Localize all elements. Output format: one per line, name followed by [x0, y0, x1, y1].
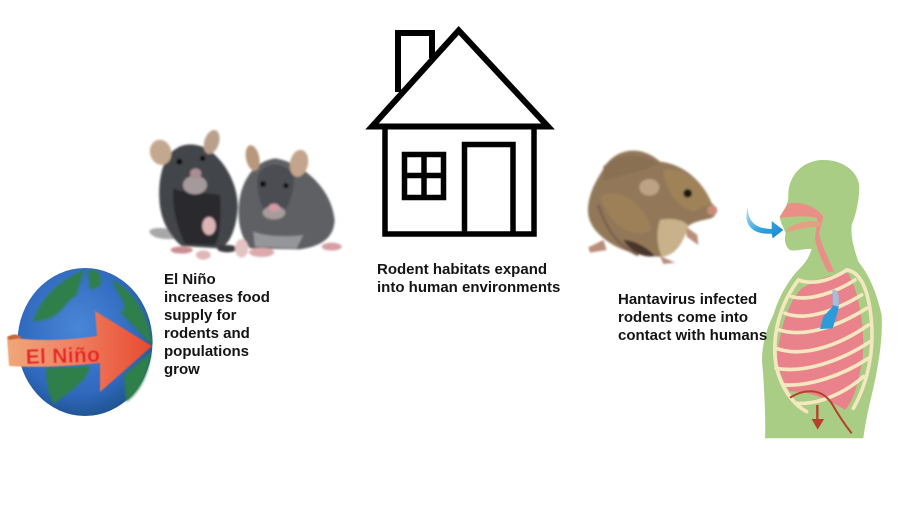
arrow [7, 311, 152, 392]
chimney [398, 33, 432, 92]
text: El Niño step: supply for [164, 307, 237, 324]
image: brown mouse [588, 151, 717, 264]
door [464, 144, 513, 234]
body silhouette [762, 160, 882, 438]
arrow label: El Niño [25, 343, 101, 369]
text: El Niño step: populations [164, 343, 249, 360]
right rat [235, 144, 342, 258]
text: El Niño step: El Niño [164, 271, 216, 288]
text: El Niño step: rodents and [164, 325, 250, 342]
text: contact step: Hantavirus infected [618, 291, 757, 308]
icon: house [372, 30, 548, 234]
icon: blue breath arrow [746, 207, 783, 238]
image: two rats [147, 128, 342, 260]
ribs [775, 270, 872, 412]
window [404, 154, 444, 198]
lungs [777, 273, 863, 410]
text: habitat step: Rodent habitats expand [377, 261, 547, 278]
icon: human respiratory figure [762, 160, 882, 438]
blue bronchi [820, 290, 839, 329]
rat tail [149, 228, 177, 239]
roof [372, 30, 548, 126]
text: contact step: rodents come into [618, 309, 748, 326]
text: habitat step: into human environments [377, 279, 560, 296]
walls [385, 128, 534, 234]
text: El Niño step: increases food [164, 289, 270, 306]
text: El Niño step: grow [164, 361, 200, 378]
icon: globe with El Niño arrow [7, 268, 152, 416]
text: contact step: contact with humans [618, 327, 767, 344]
airway [779, 203, 834, 272]
diaphragm arrows [790, 391, 852, 433]
left rat [147, 128, 238, 260]
